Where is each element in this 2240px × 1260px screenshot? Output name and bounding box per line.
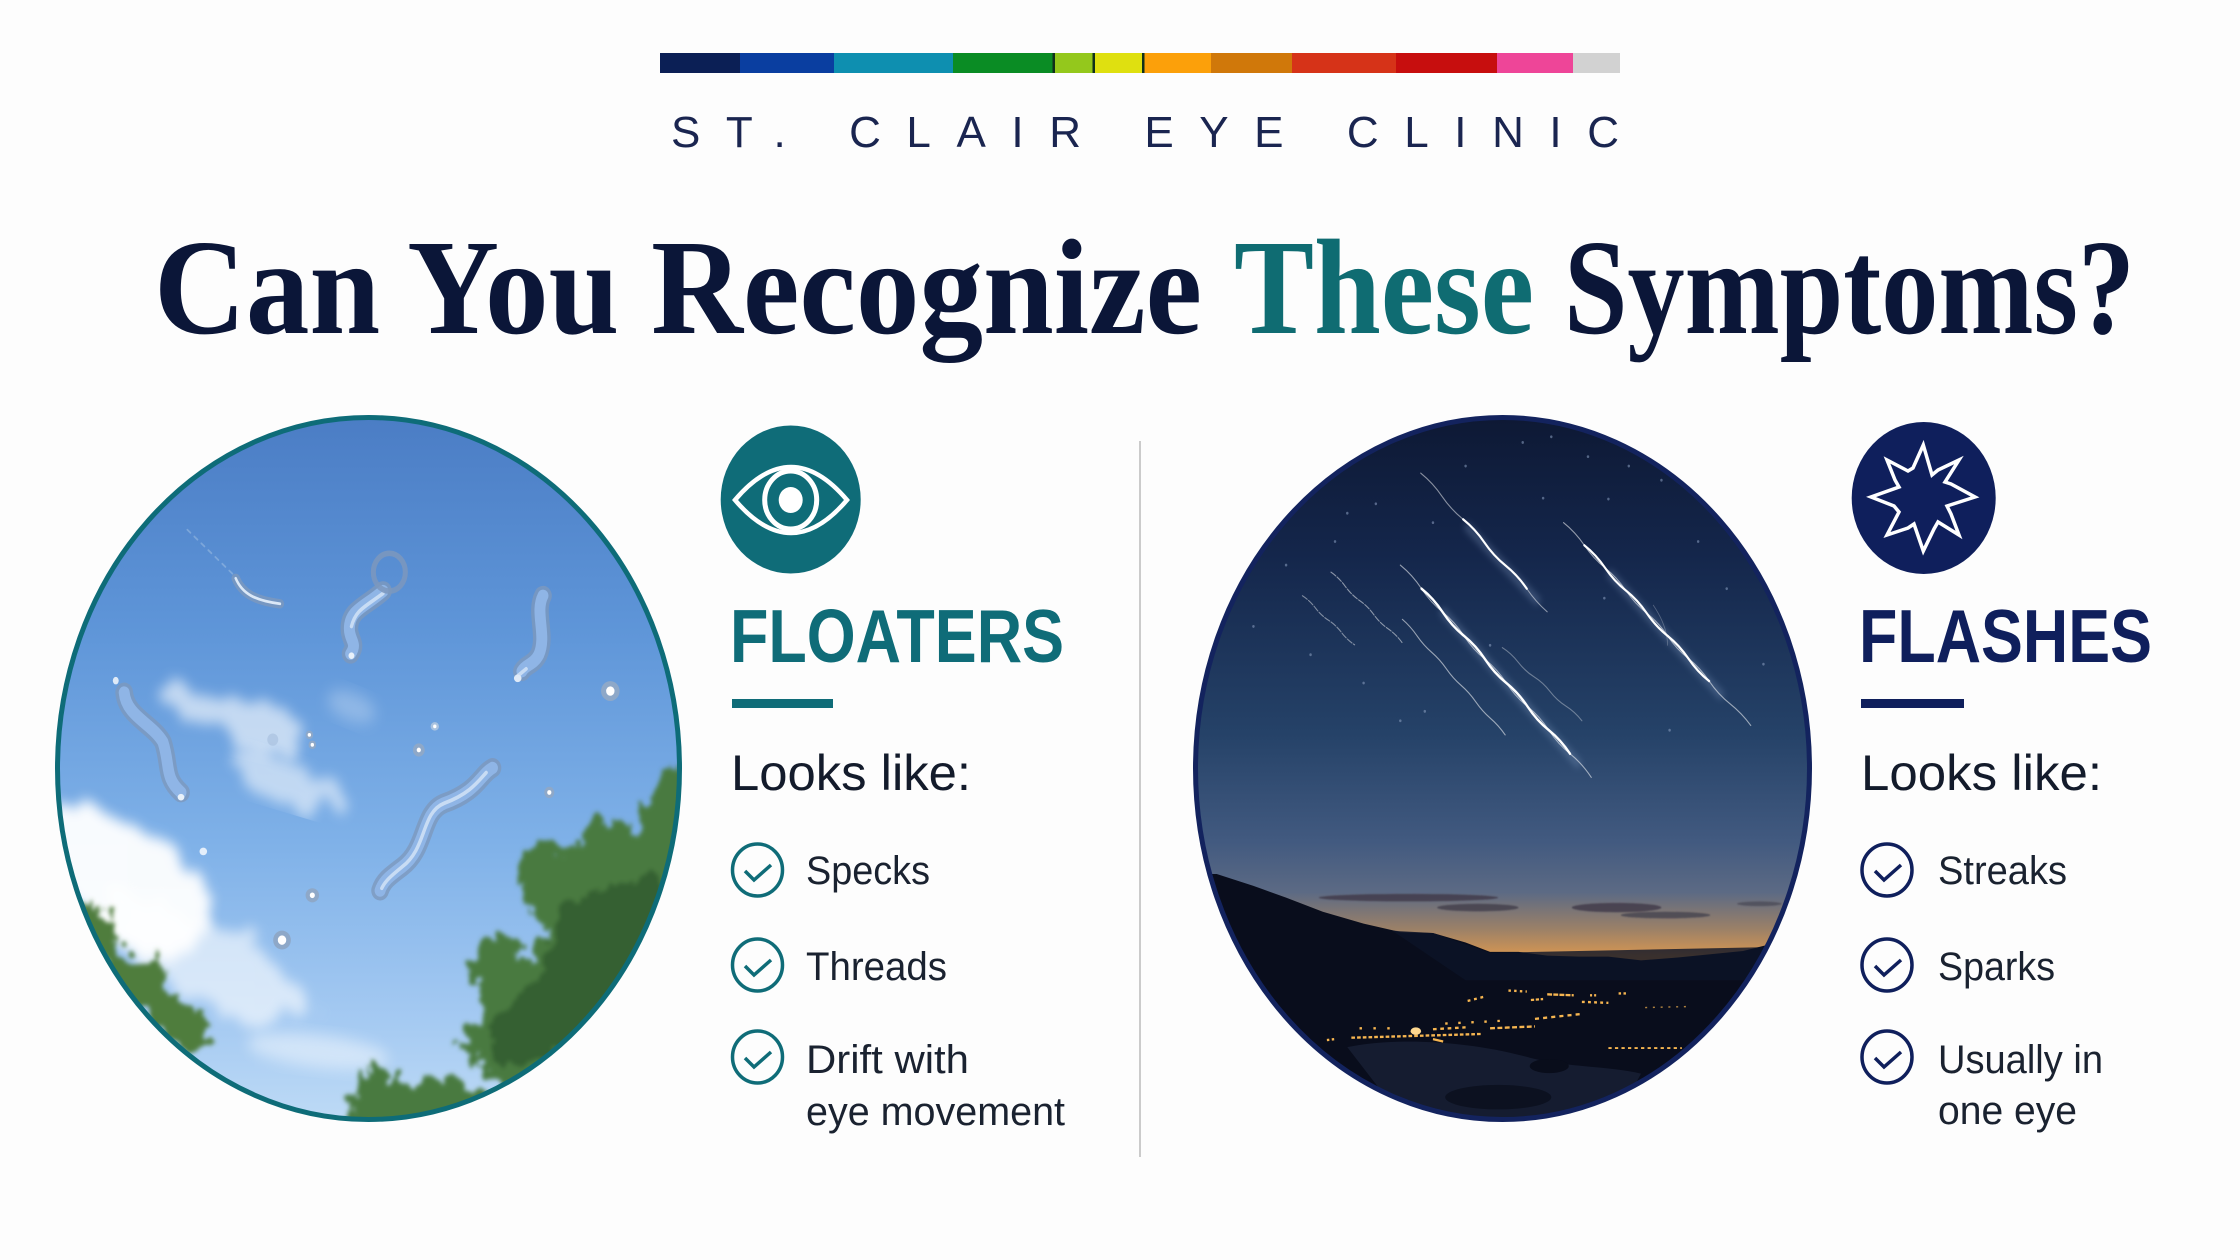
item: specks: Specks (806, 849, 930, 893)
item: drift with eye movement: Drift with (806, 1038, 969, 1082)
item: drift with eye movement: eye movement (806, 1090, 1065, 1134)
horizon glow (1543, 953, 1755, 963)
heading underline: flashes (1861, 699, 1964, 708)
brand colour bar (660, 53, 1620, 73)
heading: floaters: FLOATERS (730, 594, 1064, 678)
subheading: floaters looks like: Looks like: (731, 745, 971, 801)
heading underline: floaters (732, 699, 833, 708)
subheading: flashes looks like: Looks like: (1861, 745, 2102, 801)
flash streak glow (1441, 525, 1723, 766)
title: Symptoms? (1564, 213, 2135, 363)
title: These (1234, 213, 1534, 363)
icon: flash starburst (1852, 422, 1996, 574)
floater specks (113, 652, 620, 950)
item: usually in one eye: Usually in (1938, 1038, 2103, 1082)
horizon clouds (1319, 894, 1782, 918)
trees (65, 768, 697, 1136)
heading: flashes: FLASHES (1859, 594, 2152, 678)
floater threads (124, 530, 543, 891)
clinic name: ST. CLAIR EYE CLINIC (671, 108, 1619, 157)
item: usually in one eye: one eye (1938, 1089, 2077, 1133)
item: drift with eye movement (732, 1031, 1065, 1134)
checklist: flashes (1862, 844, 2103, 1133)
item: sparks: Sparks (1938, 945, 2055, 989)
item: threads (732, 939, 947, 991)
stars (1252, 435, 1765, 732)
title: Can You Recognize (154, 213, 1202, 363)
item: specks (732, 844, 930, 896)
clouds (7, 674, 390, 1076)
item: threads: Threads (806, 945, 947, 989)
panel: floaters illustration (55, 415, 682, 1122)
lake (1348, 1042, 1641, 1117)
title (154, 213, 2135, 363)
item: usually in one eye (1862, 1031, 2103, 1133)
centre divider (1139, 441, 1141, 1157)
panel: flashes illustration (1190, 410, 1816, 1136)
item: streaks: Streaks (1938, 849, 2067, 893)
icon: eye (721, 426, 861, 574)
mountains (1212, 874, 1765, 1086)
item: sparks (1862, 939, 2055, 991)
checklist: floaters (732, 844, 1065, 1134)
flash streaks (1302, 473, 1751, 777)
item: streaks (1862, 844, 2067, 896)
town lights (1327, 991, 1686, 1048)
